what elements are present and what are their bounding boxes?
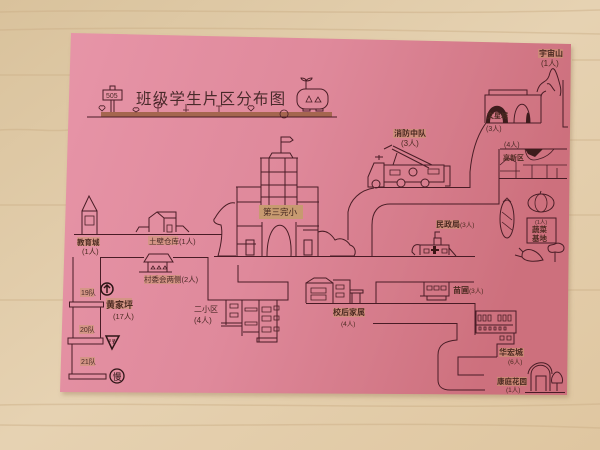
label: castle count: (3人) xyxy=(486,125,502,133)
icon: tree xyxy=(548,243,564,262)
castle xyxy=(485,90,541,123)
road: left village road: 19队 xyxy=(81,288,96,297)
label: tower: 教育城 xyxy=(77,238,100,247)
label: school name plate: 第三完小 xyxy=(263,207,298,217)
icon: tower xyxy=(82,196,97,234)
label: after-school home: 校后家属 xyxy=(333,308,365,317)
label: clinic: 苗圃(3人) xyxy=(453,285,483,295)
box: vegetable and fruit label: 蔬菜 xyxy=(532,224,547,234)
icon: slow sign xyxy=(110,369,124,383)
label: tower: (1人) xyxy=(82,247,99,256)
label: fire brigade: (3人) xyxy=(401,139,419,148)
box: vegetable and fruit label xyxy=(527,218,556,243)
road: lower central xyxy=(306,282,475,335)
label: garden: 康庭花园 xyxy=(497,377,527,386)
label: Huangjiaping xyxy=(106,298,134,321)
building: Huahong city xyxy=(476,311,516,357)
school building xyxy=(214,137,355,256)
label: after-school home: (4人) xyxy=(341,320,355,328)
road: upper left ground line xyxy=(74,234,222,236)
after-school building xyxy=(306,278,363,303)
fire truck xyxy=(368,145,450,188)
label: Huangjiaping: (17人) xyxy=(113,312,134,321)
apartment building xyxy=(221,300,288,342)
title: 班级学生片区分布图 xyxy=(136,90,286,108)
label: mountain: 宇宙山 xyxy=(539,49,563,58)
road: left village road: 20队 xyxy=(80,325,95,334)
label: second district: (4人) xyxy=(194,316,212,325)
label: garden xyxy=(497,376,527,394)
icon: arrow sign xyxy=(101,283,113,295)
icon: radish xyxy=(515,248,543,261)
label: Huahong city: (6人) xyxy=(508,358,522,366)
label: Huahong city: 华宏城 xyxy=(499,348,523,357)
stone wall building xyxy=(499,149,567,204)
box: vegetable and fruit label: 基地 xyxy=(532,233,547,243)
label: tower xyxy=(77,237,100,256)
title xyxy=(87,90,337,117)
label: after-school home xyxy=(333,307,365,328)
label: second district: 二小区 xyxy=(194,305,218,314)
panel: pink paper map xyxy=(60,33,573,398)
stone wall building: 高新区 xyxy=(503,153,524,162)
icon: pumpkin xyxy=(528,191,554,212)
label: fire brigade: 消防中队 xyxy=(394,129,426,138)
icon: bus with sprout xyxy=(297,78,328,111)
label: Huangjiaping: 黄家坪 xyxy=(106,300,133,310)
road: lower right xyxy=(373,324,497,390)
label: civil affairs bureau: 民政局(3人) xyxy=(436,219,474,229)
icon: yield sign xyxy=(106,336,119,349)
label: fire brigade xyxy=(393,128,426,148)
icon: warehouse xyxy=(136,212,189,232)
label: mountain: (1人) xyxy=(541,59,559,68)
label: school name plate xyxy=(259,205,303,219)
icon: mountain xyxy=(537,69,568,127)
label: Huahong city xyxy=(499,347,524,366)
label: mountain xyxy=(538,48,563,68)
hospital xyxy=(412,232,456,256)
clinic xyxy=(420,282,449,300)
road: second curve xyxy=(372,150,499,256)
icon: corn xyxy=(500,198,514,238)
label: village hall: 村委会两侧(2人) xyxy=(144,274,199,284)
icon: 505 signpost: 505 xyxy=(106,93,118,100)
village hall xyxy=(139,254,173,272)
icon: 505 signpost xyxy=(99,86,288,118)
garden arch xyxy=(525,363,565,392)
road: central block xyxy=(100,257,288,300)
box: vegetable and fruit label: (1人) xyxy=(535,219,547,226)
label: stone wall count: (4人) xyxy=(504,141,520,149)
road: curve from truck to castle xyxy=(348,123,486,240)
road: left village road xyxy=(68,257,106,379)
road: main ground line xyxy=(214,256,475,258)
castle: 文星城 xyxy=(487,111,508,120)
road: left village road: 21队 xyxy=(81,357,96,366)
label: warehouse: 土壁仓库(1人) xyxy=(149,236,196,246)
label: garden: (1人) xyxy=(506,386,520,394)
icon: slow sign: 慢 xyxy=(112,371,122,382)
